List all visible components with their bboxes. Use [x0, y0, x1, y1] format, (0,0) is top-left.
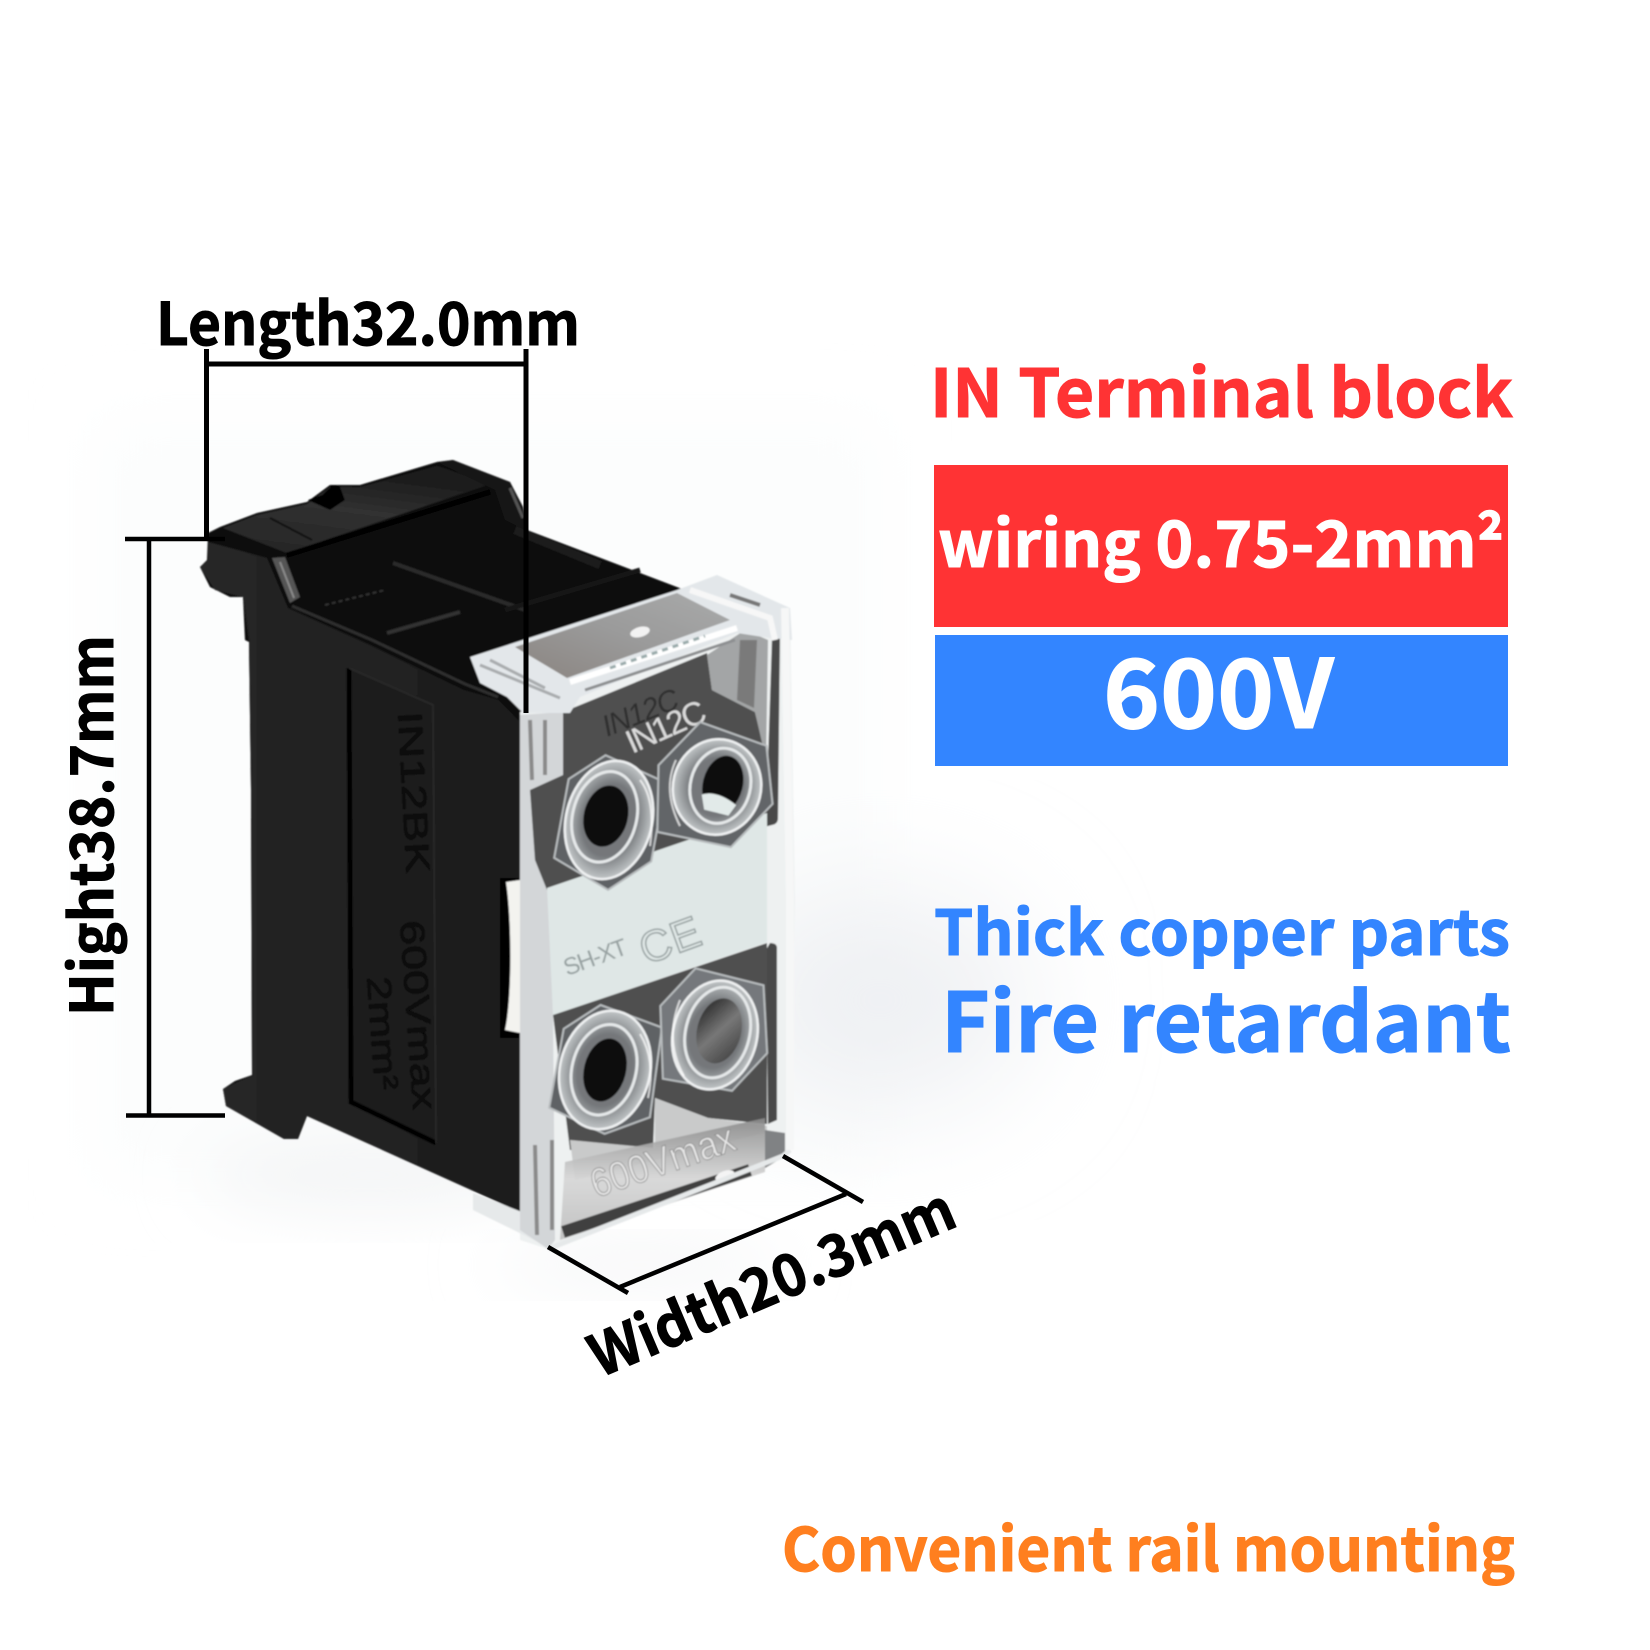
length dimension lines [206, 349, 526, 713]
embossed 600Vmax: 600Vmax [585, 1116, 741, 1207]
lower mirror reflection [570, 1098, 767, 1180]
terminal hole: lower left [541, 998, 673, 1143]
feature: fire retardant: Fire retardant [941, 957, 1511, 1076]
height label: Hight38.7mm [45, 635, 130, 1016]
top cap of cover [470, 575, 792, 1150]
product photo: terminal block [200, 460, 795, 1249]
right dark strips [758, 638, 780, 1124]
flange bottom left [473, 1193, 552, 1249]
upper dark panel [530, 653, 767, 890]
height dimension lines [125, 539, 225, 1116]
title: IN Terminal block [930, 341, 1513, 437]
banner: wiring size: wiring 0.75-2mm² [938, 494, 1504, 586]
embossed side text: 2mm² [359, 975, 405, 1091]
embossed CE mark [560, 907, 708, 982]
body lip and interior ribs [292, 530, 640, 697]
embossed side text: IN12BK [390, 710, 436, 875]
embossed IN12C: IN12C [597, 683, 684, 743]
handle details [270, 460, 525, 603]
embossed side text [359, 710, 443, 1111]
terminal hole: lower right [643, 962, 783, 1102]
left glass column [520, 712, 563, 1249]
photo background shading [95, 420, 1030, 1283]
banner: wiring size [934, 465, 1508, 627]
banner: voltage [935, 619, 1508, 766]
width label: Width20.3mm [574, 1164, 967, 1394]
embossed CE mark: CE [633, 907, 708, 974]
embossed IN12C: IN12C [620, 692, 712, 760]
embossed side text: 600Vmax [392, 919, 443, 1111]
side slot clip [500, 878, 520, 1038]
black body silhouette [200, 460, 690, 1212]
feature: thick copper parts: Thick copper parts [934, 883, 1510, 973]
width dimension lines [548, 1156, 863, 1293]
lower dark panel [553, 943, 767, 1150]
upper right glass [707, 630, 768, 760]
clear cover front base [520, 608, 795, 1249]
terminal hole: upper right [643, 715, 788, 857]
terminal hole: upper left [545, 748, 673, 898]
center label band [547, 813, 767, 1015]
top handle [223, 466, 490, 553]
feature: rail mounting: Convenient rail mounting [782, 1502, 1515, 1589]
body side face [200, 542, 520, 1212]
banner: voltage: 600V [1103, 619, 1335, 756]
length label: Length32.0mm [156, 277, 580, 362]
recessed label panel [349, 668, 436, 1143]
terminal hole glints [640, 760, 684, 1098]
bottom lip [548, 1118, 790, 1249]
embossed CE mark: SH-XT [560, 934, 631, 982]
